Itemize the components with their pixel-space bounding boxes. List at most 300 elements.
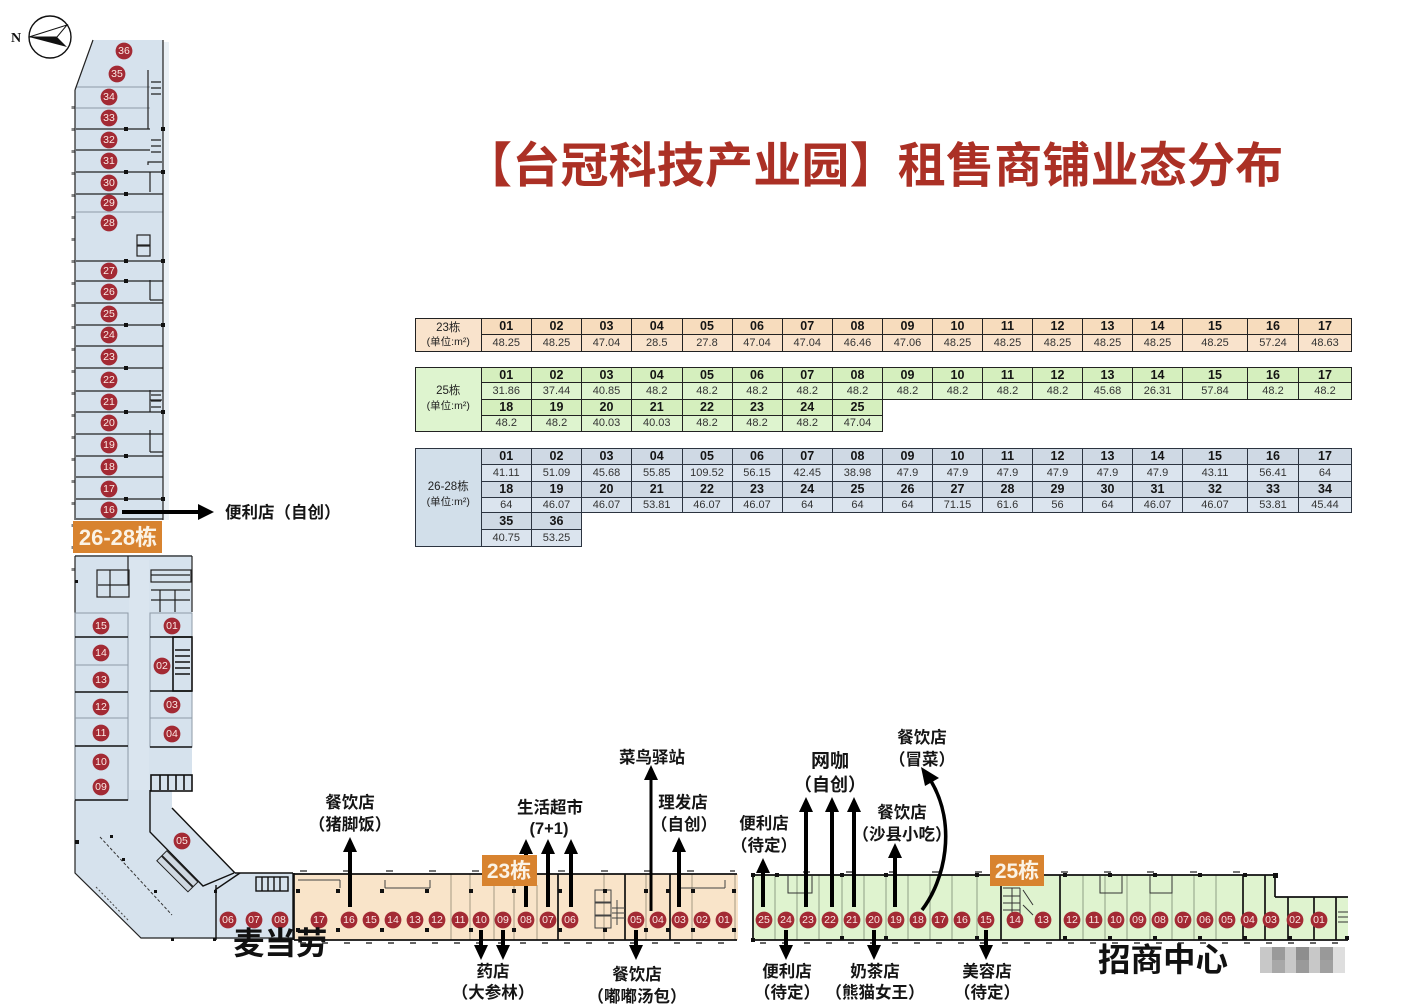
- table: building 23 unit areas: 48.25: [994, 336, 1021, 348]
- table: building 25 unit areas: 15: [1208, 368, 1222, 382]
- table: building 25 unit areas: 04: [650, 368, 664, 382]
- unit markers: building 25: 08: [1154, 914, 1166, 926]
- table: building 25 unit areas: 40.03: [643, 417, 671, 429]
- unit markers: 26-28 lower wing: 13: [95, 674, 107, 686]
- table: buildings 26-28 unit areas: 06: [750, 449, 764, 463]
- table: building 25 unit areas: 20: [600, 400, 613, 414]
- unit markers: 26-28 lower wing: [93, 618, 288, 928]
- table: buildings 26-28 unit areas: 109.52: [690, 466, 724, 478]
- unit markers: 26-28 upper wing: 36: [118, 45, 130, 57]
- label: 便利店 待定 lower: 便利店: [762, 962, 812, 981]
- unit markers: building 23: 15: [365, 914, 377, 926]
- table: building 25 unit areas: 12: [1051, 368, 1064, 382]
- blurred mosaic block: [1260, 947, 1345, 973]
- unit markers: 26-28 upper wing: 28: [103, 217, 115, 229]
- unit markers: 26-28 lower wing: 08: [274, 914, 286, 926]
- table: building 23 unit areas: 48.25: [1201, 336, 1229, 348]
- label: 餐饮店 冒菜: [889, 728, 955, 769]
- table: buildings 26-28 unit areas: 05: [700, 449, 714, 463]
- unit markers: building 23: 02: [696, 914, 708, 926]
- table: building 23 unit areas: 23栋: [436, 322, 460, 334]
- table: building 25 unit areas: 22: [700, 400, 714, 414]
- unit markers: building 25: 02: [1289, 914, 1301, 926]
- table: building 25 unit areas: 21: [650, 400, 664, 414]
- table: building 25 unit areas: 48.2: [696, 384, 718, 396]
- table: buildings 26-28 unit areas: 43.11: [1202, 466, 1228, 478]
- table: buildings 26-28 unit areas: 38.98: [844, 466, 871, 478]
- table: buildings 26-28 unit areas: 24: [800, 482, 814, 496]
- arrow: curved to 冒菜: [921, 767, 946, 910]
- unit markers: building 25: 05: [1221, 914, 1233, 926]
- table: building 25 unit areas: 48.2: [696, 417, 718, 429]
- table: buildings 26-28 unit areas: 04: [650, 449, 664, 463]
- table: building 25 unit areas: 23: [750, 400, 764, 414]
- table: buildings 26-28 unit areas: 64: [500, 498, 512, 510]
- table: buildings 26-28 unit areas: 46.07: [1144, 498, 1171, 510]
- title: 【台冠科技产业园】租售商铺业态分布: [464, 140, 1283, 193]
- unit markers: 26-28 upper wing: [101, 43, 132, 518]
- unit markers: 26-28 lower wing: 02: [156, 660, 168, 672]
- unit markers: 26-28 upper wing: 32: [103, 134, 115, 146]
- tag: 26-28栋: [73, 521, 162, 553]
- label: 餐饮店 猪脚饭: 餐饮店: [325, 793, 375, 812]
- table: buildings 26-28 unit areas: 46.07: [1201, 498, 1229, 510]
- table: buildings 26-28 unit areas: 28: [1001, 482, 1014, 496]
- table: buildings 26-28 unit areas: 46.07: [743, 498, 771, 510]
- table: buildings 26-28 unit areas: 34: [1318, 482, 1332, 496]
- arrows: pointing up from units: [343, 765, 902, 911]
- table: buildings 26-28 unit areas: 46.07: [693, 498, 721, 510]
- table: buildings 26-28 unit areas: 47.9: [1097, 466, 1118, 478]
- unit markers: building 23: 11: [455, 914, 466, 926]
- table: building 25 unit areas: 48.2: [947, 384, 968, 396]
- panel: building 26-28 lower wing: [75, 555, 293, 941]
- table: building 25 unit areas: 31.86: [492, 384, 520, 396]
- table: building 25 unit areas: 48.2: [646, 384, 667, 396]
- table: building 23 unit areas: 10: [951, 319, 964, 333]
- table: buildings 26-28 unit areas: 22: [700, 482, 714, 496]
- label: 餐饮店 嘟嘟汤包: （嘟嘟汤包）: [588, 986, 686, 1006]
- table: building 23 unit areas: 17: [1318, 319, 1332, 333]
- unit markers: building 25: 04: [1243, 914, 1255, 926]
- unit markers: building 25: 19: [890, 914, 902, 926]
- unit markers: building 25: 06: [1199, 914, 1211, 926]
- table: buildings 26-28 unit areas: 19: [550, 482, 563, 496]
- label: 餐饮店 沙县小吃: [852, 803, 952, 844]
- table: buildings 26-28 unit areas: 25: [851, 482, 864, 496]
- table: buildings 26-28 unit areas: 40.75: [492, 532, 520, 544]
- table: buildings 26-28 unit areas: 27: [951, 482, 964, 496]
- label: 网咖 自创: 网咖: [811, 750, 849, 772]
- table: buildings 26-28 unit areas: 12: [1051, 449, 1064, 463]
- unit markers: building 23: 05: [630, 914, 642, 926]
- panel: building 23 strip: [294, 871, 738, 943]
- unit markers: 26-28 lower wing: 06: [222, 914, 234, 926]
- label: 便利店 待定 lower: [754, 962, 820, 1002]
- table: buildings 26-28 unit areas: 29: [1051, 482, 1064, 496]
- table: building 25 unit areas: 37.44: [543, 384, 570, 396]
- table: buildings 26-28 unit areas: 26-28栋: [428, 480, 469, 492]
- table: buildings 26-28 unit areas: 30: [1101, 482, 1114, 496]
- unit markers: building 23: 16: [343, 914, 355, 926]
- table: buildings 26-28 unit areas: 14: [1151, 449, 1164, 463]
- table: buildings 26-28 unit areas: 46.07: [543, 498, 570, 510]
- table: building 23 unit areas: 48.25: [944, 336, 971, 348]
- unit markers: 26-28 lower wing: 09: [95, 781, 107, 793]
- table: buildings 26-28 unit areas: 42.45: [793, 466, 821, 478]
- table: buildings 26-28 unit areas: 64: [851, 498, 864, 510]
- table: building 25 unit areas: 57.84: [1201, 384, 1229, 396]
- table: buildings 26-28 unit areas: 51.09: [543, 466, 570, 478]
- label: 便利店 待定 upper: 便利店: [739, 814, 789, 833]
- arrow: to convenience store at unit 16: [122, 504, 214, 520]
- table: buildings 26-28 unit areas: 55.85: [643, 466, 671, 478]
- table: building 23 unit areas: 05: [700, 319, 714, 333]
- label: 药店 大参林: （大参林）: [452, 982, 534, 1002]
- table: buildings 26-28 unit areas: 32: [1208, 482, 1222, 496]
- table: building 25 unit areas: 25栋: [436, 384, 460, 396]
- panel: building 25 strip: [751, 872, 1349, 943]
- unit markers: building 23: 14: [387, 914, 399, 926]
- table: building 23 unit areas: 48.25: [543, 336, 570, 348]
- unit markers: 26-28 lower wing: 03: [166, 699, 178, 711]
- unit markers: 26-28 upper wing: 27: [103, 265, 115, 277]
- icon: north compass: N: [11, 31, 21, 46]
- table: building 25 unit areas: 06: [750, 368, 764, 382]
- unit markers: 26-28 lower wing: 01: [166, 620, 178, 632]
- table: building 25 unit areas: 10: [951, 368, 964, 382]
- unit markers: 26-28 upper wing: 20: [103, 417, 115, 429]
- table: buildings 26-28 unit areas: 08: [851, 449, 864, 463]
- unit markers: 26-28 lower wing: 14: [95, 647, 107, 659]
- unit markers: building 25: 17: [934, 914, 946, 926]
- label: 餐饮店 猪脚饭: （猪脚饭）: [309, 815, 391, 834]
- unit markers: building 25: 23: [802, 914, 814, 926]
- table: building 25 unit areas: 24: [800, 400, 814, 414]
- table: building 23 unit areas: 48.25: [1144, 336, 1171, 348]
- table: buildings 26-28 unit areas: 46.07: [593, 498, 620, 510]
- label: 奶茶店 熊猫女王: 奶茶店: [850, 962, 900, 981]
- label: 理发店 自创: [651, 792, 717, 834]
- table: building 25 unit areas: 13: [1101, 368, 1114, 382]
- unit markers: building 25: 01: [1313, 914, 1325, 926]
- table: buildings 26-28 unit areas: [415, 448, 1352, 547]
- table: building 25 unit areas: 05: [700, 368, 714, 382]
- unit markers: building 23: 04: [652, 914, 664, 926]
- label: 奶茶店 熊猫女王: [826, 962, 924, 1002]
- table: buildings 26-28 unit areas: 64: [801, 498, 813, 510]
- tag: 25栋: 25栋: [995, 860, 1039, 883]
- table: building 25 unit areas: 48.2: [746, 384, 768, 396]
- table: building 25 unit areas: 48.2: [997, 384, 1018, 396]
- unit markers: building 25: 09: [1132, 914, 1144, 926]
- table: building 23 unit areas: 28.5: [646, 336, 667, 348]
- unit markers: building 23: 07: [542, 914, 554, 926]
- unit markers: 26-28 upper wing: 33: [103, 112, 115, 124]
- table: building 25 unit areas: 47.04: [844, 417, 871, 429]
- unit markers: 26-28 upper wing: 17: [103, 483, 115, 495]
- unit markers: 26-28 upper wing: 30: [103, 177, 115, 189]
- label: 餐饮店 冒菜: （冒菜）: [889, 750, 955, 769]
- label: 网咖 自创: [794, 750, 866, 795]
- table: building 25 unit areas: 48.2: [546, 417, 567, 429]
- table: buildings 26-28 unit areas: 45.68: [593, 466, 620, 478]
- label: 美容店 待定: （待定）: [954, 982, 1020, 1002]
- label: 招商中心: 招商中心: [1098, 942, 1228, 978]
- table: building 25 unit areas: (单位:m²): [427, 400, 470, 412]
- table: building 25 unit areas: 18: [499, 400, 513, 414]
- unit markers: building 23: 12: [431, 914, 443, 926]
- table: building 25 unit areas: 48.2: [897, 384, 918, 396]
- table: buildings 26-28 unit areas: 47.9: [897, 466, 918, 478]
- unit markers: building 25: [756, 912, 1327, 928]
- table: buildings 26-28 unit areas: 35: [499, 514, 513, 528]
- table: building 23 unit areas: 02: [550, 319, 563, 333]
- table: buildings 26-28 unit areas: 47.9: [997, 466, 1018, 478]
- table: building 23 unit areas: 11: [1001, 319, 1014, 333]
- unit markers: 26-28 upper wing: 25: [103, 308, 115, 320]
- label: 便利店 待定 upper: [731, 814, 797, 855]
- unit markers: building 25: 15: [980, 914, 992, 926]
- label: 餐饮店 猪脚饭: [309, 793, 391, 834]
- unit markers: 26-28 lower wing: 11: [96, 727, 107, 739]
- table: building 23 unit areas: 47.04: [793, 336, 821, 348]
- unit markers: building 25: 03: [1265, 914, 1277, 926]
- unit markers: building 25: 18: [912, 914, 924, 926]
- table: building 25 unit areas: 48.2: [797, 417, 818, 429]
- label: 生活超市 7+1: 生活超市: [517, 797, 583, 817]
- label: 餐饮店 沙县小吃: （沙县小吃）: [852, 825, 952, 844]
- unit markers: 26-28 upper wing: 18: [103, 461, 115, 473]
- unit markers: 26-28 lower wing: 15: [95, 620, 107, 632]
- unit markers: 26-28 upper wing: 31: [103, 155, 115, 167]
- table: building 25 unit areas: 26.31: [1144, 384, 1171, 396]
- unit markers: 26-28 lower wing: 12: [95, 701, 107, 713]
- table: building 25 unit areas: 48.2: [496, 417, 517, 429]
- table: building 25 unit areas: 03: [600, 368, 613, 382]
- unit markers: 26-28 upper wing: 24: [103, 329, 115, 341]
- arrows: pointing down from units: [474, 930, 993, 960]
- table: building 23 unit areas: 48.25: [1044, 336, 1071, 348]
- table: building 25 unit areas: 48.2: [746, 417, 768, 429]
- label: 便利店（自创） at unit 16: 便利店（自创）: [225, 502, 340, 522]
- unit markers: building 25: 13: [1037, 914, 1049, 926]
- table: buildings 26-28 unit areas: 41.11: [493, 466, 520, 478]
- table: building 23 unit areas: 01: [499, 319, 513, 333]
- table: buildings 26-28 unit areas: 56.41: [1259, 466, 1287, 478]
- unit markers: building 25: 22: [824, 914, 836, 926]
- table: building 25 unit areas: 07: [800, 368, 814, 382]
- table: buildings 26-28 unit areas: 47.9: [947, 466, 968, 478]
- table: building 25 unit areas: 09: [901, 368, 914, 382]
- unit markers: 26-28 lower wing: 05: [176, 835, 188, 847]
- table: buildings 26-28 unit areas: 45.44: [1311, 498, 1339, 510]
- table: building 25 unit areas: 01: [499, 368, 513, 382]
- unit markers: building 25: 14: [1009, 914, 1021, 926]
- table: buildings 26-28 unit areas: (单位:m²): [427, 496, 470, 508]
- table: building 25 unit areas: 02: [550, 368, 563, 382]
- table: buildings 26-28 unit areas: 61.6: [997, 498, 1018, 510]
- table: building 23 unit areas: (单位:m²): [427, 336, 470, 348]
- unit markers: building 25: 21: [846, 914, 858, 926]
- label: 奶茶店 熊猫女王: （熊猫女王）: [826, 982, 924, 1002]
- table: building 23 unit areas: 46.46: [844, 336, 871, 348]
- table: building 25 unit areas: 19: [550, 400, 563, 414]
- table: building 23 unit areas: 57.24: [1259, 336, 1287, 348]
- unit markers: 26-28 upper wing: 26: [103, 286, 115, 298]
- label: 麦当劳: 麦当劳: [233, 925, 328, 961]
- table: building 23 unit areas: 48.25: [492, 336, 520, 348]
- table: buildings 26-28 unit areas: 21: [650, 482, 664, 496]
- table: buildings 26-28 unit areas: 53.81: [643, 498, 671, 510]
- table: building 25 unit areas: 40.03: [593, 417, 620, 429]
- table: building 23 unit areas: 15: [1208, 319, 1222, 333]
- table: buildings 26-28 unit areas: 64: [1101, 498, 1114, 510]
- label: 美容店 待定: [954, 961, 1020, 1002]
- table: buildings 26-28 unit areas: 33: [1266, 482, 1280, 496]
- table: building 25 unit areas: 17: [1318, 368, 1332, 382]
- table: buildings 26-28 unit areas: 47.9: [1147, 466, 1168, 478]
- table: building 23 unit areas: 47.06: [894, 336, 921, 348]
- label: 餐饮店 沙县小吃: 餐饮店: [877, 803, 927, 822]
- table: buildings 26-28 unit areas: 47.9: [1047, 466, 1068, 478]
- table: building 25 unit areas: 48.2: [847, 384, 868, 396]
- unit markers: 26-28 upper wing: 21: [103, 396, 115, 408]
- table: buildings 26-28 unit areas: 02: [550, 449, 563, 463]
- table: building 23 unit areas: 16: [1266, 319, 1280, 333]
- label: 药店 大参林: [452, 962, 534, 1002]
- unit markers: building 23: 10: [475, 914, 487, 926]
- tag: 25栋: [990, 855, 1044, 886]
- table: buildings 26-28 unit areas: 13: [1101, 449, 1114, 463]
- unit markers: building 23: [311, 912, 732, 928]
- table: building 23 unit areas: 12: [1051, 319, 1064, 333]
- label: 理发店 自创: 理发店: [658, 792, 708, 812]
- unit markers: building 25: 12: [1066, 914, 1078, 926]
- table: buildings 26-28 unit areas: 64: [901, 498, 914, 510]
- table: building 23 unit areas: [415, 318, 1352, 352]
- label: 餐饮店 嘟嘟汤包: [588, 965, 686, 1006]
- label: 网咖 自创: （自创）: [794, 775, 866, 795]
- table: building 25 unit areas: 16: [1266, 368, 1280, 382]
- table: building 25 unit areas: 40.85: [593, 384, 620, 396]
- table: building 25 unit areas: 45.68: [1094, 384, 1121, 396]
- table: building 25 unit areas: 48.2: [1262, 384, 1284, 396]
- label: 生活超市 7+1: (7+1): [530, 820, 568, 838]
- table: building 25 unit areas: 48.2: [797, 384, 818, 396]
- unit markers: 26-28 upper wing: 19: [103, 439, 115, 451]
- unit markers: building 25: 07: [1177, 914, 1189, 926]
- table: buildings 26-28 unit areas: 16: [1266, 449, 1280, 463]
- table: buildings 26-28 unit areas: 31: [1151, 482, 1164, 496]
- table: buildings 26-28 unit areas: 07: [800, 449, 814, 463]
- label: 餐饮店 嘟嘟汤包: 餐饮店: [612, 965, 662, 984]
- table: building 25 unit areas: 48.2: [1047, 384, 1068, 396]
- table: buildings 26-28 unit areas: 17: [1318, 449, 1332, 463]
- tag: 23栋: 23栋: [487, 860, 531, 883]
- table: buildings 26-28 unit areas: 56.15: [743, 466, 771, 478]
- unit markers: 26-28 lower wing: 04: [166, 728, 178, 740]
- unit markers: building 25: 24: [780, 914, 792, 926]
- label: 便利店 待定 lower: （待定）: [754, 982, 820, 1002]
- table: building 23 unit areas: 47.04: [593, 336, 620, 348]
- table: building 23 unit areas: 48.63: [1311, 336, 1339, 348]
- label: 美容店 待定: 美容店: [962, 961, 1012, 981]
- unit markers: building 25: 16: [956, 914, 968, 926]
- unit markers: 26-28 upper wing: 29: [103, 197, 115, 209]
- table: buildings 26-28 unit areas: 15: [1208, 449, 1222, 463]
- unit markers: 26-28 upper wing: 22: [103, 374, 115, 386]
- table: building 23 unit areas: 04: [650, 319, 664, 333]
- table: buildings 26-28 unit areas: 64: [1319, 466, 1331, 478]
- table: buildings 26-28 unit areas: 01: [499, 449, 513, 463]
- table: buildings 26-28 unit areas: 71.15: [944, 498, 971, 510]
- table: buildings 26-28 unit areas: 10: [951, 449, 964, 463]
- table: building 23 unit areas: 48.25: [1094, 336, 1121, 348]
- unit markers: building 23: 06: [564, 914, 576, 926]
- table: building 23 unit areas: 13: [1101, 319, 1114, 333]
- label: 理发店 自创: （自创）: [651, 814, 717, 834]
- table: building 25 unit areas: 11: [1001, 368, 1014, 382]
- tag: 26-28栋: 26-28栋: [79, 525, 157, 550]
- table: buildings 26-28 unit areas: 36: [550, 514, 563, 528]
- table: building 23 unit areas: 08: [851, 319, 864, 333]
- table: buildings 26-28 unit areas: 20: [600, 482, 613, 496]
- table: building 23 unit areas: 09: [901, 319, 914, 333]
- unit markers: building 25: 20: [868, 914, 880, 926]
- table: building 25 unit areas: 14: [1151, 368, 1164, 382]
- table: buildings 26-28 unit areas: 23: [750, 482, 764, 496]
- table: building 25 unit areas: 25: [851, 400, 864, 414]
- table: buildings 26-28 unit areas: 18: [499, 482, 513, 496]
- unit markers: building 23: 08: [520, 914, 532, 926]
- unit markers: 26-28 upper wing: 23: [103, 351, 115, 363]
- table: building 23 unit areas: 07: [800, 319, 814, 333]
- table: building 23 unit areas: 14: [1151, 319, 1164, 333]
- unit markers: building 25: 10: [1110, 914, 1122, 926]
- table: buildings 26-28 unit areas: 11: [1001, 449, 1014, 463]
- table: building 25 unit areas: 48.2: [1314, 384, 1336, 396]
- table: building 23 unit areas: 03: [600, 319, 613, 333]
- unit markers: building 25: 11: [1089, 914, 1100, 926]
- table: building 23 unit areas: 27.8: [696, 336, 718, 348]
- unit markers: building 23: 01: [718, 914, 730, 926]
- table: buildings 26-28 unit areas: 09: [901, 449, 914, 463]
- table: building 23 unit areas: 47.04: [743, 336, 771, 348]
- table: building 25 unit areas: [415, 367, 1352, 432]
- label: 菜鸟驿站: 菜鸟驿站: [619, 747, 685, 767]
- unit markers: 26-28 lower wing: 10: [95, 756, 107, 768]
- label: 餐饮店 冒菜: 餐饮店: [897, 728, 947, 747]
- table: buildings 26-28 unit areas: 53.81: [1259, 498, 1287, 510]
- label: 便利店 待定 upper: （待定）: [731, 835, 797, 855]
- table: buildings 26-28 unit areas: 53.25: [543, 532, 570, 544]
- label: 药店 大参林: 药店: [476, 962, 510, 981]
- unit markers: building 23: 03: [674, 914, 686, 926]
- table: buildings 26-28 unit areas: 56: [1051, 498, 1064, 510]
- icon: north compass: [11, 16, 71, 58]
- table: building 23 unit areas: 06: [750, 319, 764, 333]
- unit markers: 26-28 lower wing: 07: [248, 914, 260, 926]
- unit markers: 26-28 upper wing: 16: [103, 504, 115, 516]
- unit markers: building 25: 25: [758, 914, 770, 926]
- unit markers: building 23: 09: [497, 914, 509, 926]
- unit markers: 26-28 upper wing: 34: [103, 91, 115, 103]
- panel: building 26-28 upper wing: [73, 40, 169, 576]
- unit markers: building 23: 13: [409, 914, 421, 926]
- table: buildings 26-28 unit areas: 03: [600, 449, 613, 463]
- tag: 23栋: [482, 855, 537, 886]
